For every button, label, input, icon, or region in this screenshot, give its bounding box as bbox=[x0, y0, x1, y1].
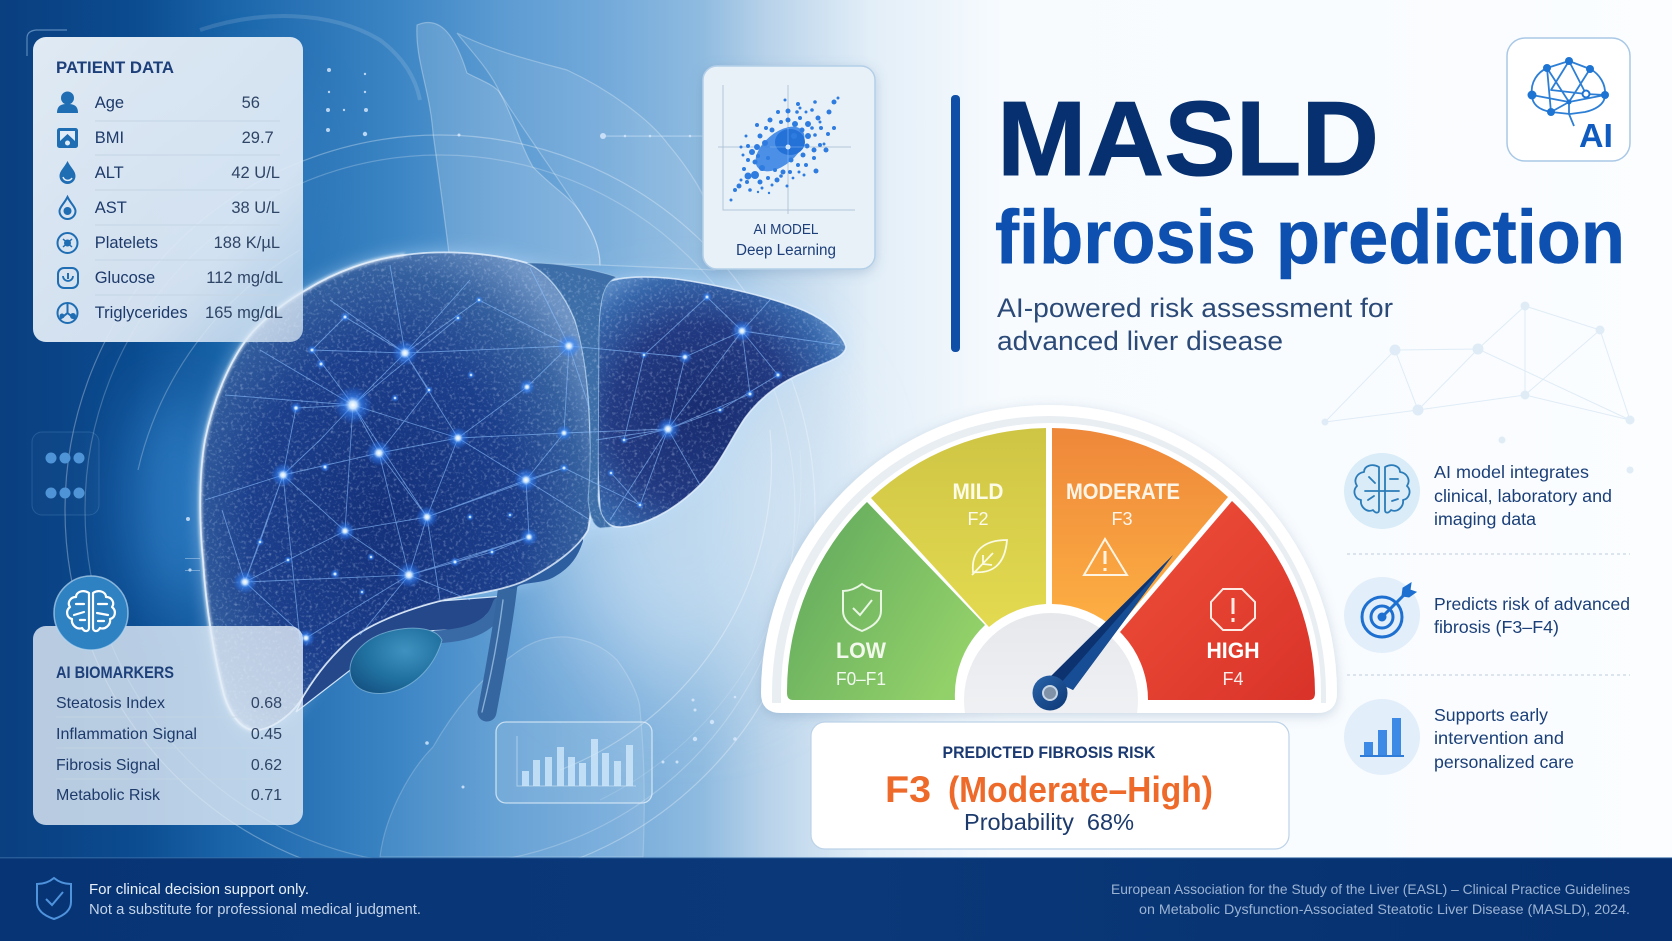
panel: AI biomarkers: Inflammation Signal bbox=[56, 726, 197, 743]
scatter plot bbox=[718, 85, 855, 214]
left liver lobe bbox=[597, 277, 846, 527]
icon: warning triangle bbox=[1084, 539, 1127, 575]
row: platelets: Platelets bbox=[95, 234, 158, 252]
row: triglycerides: 165 mg/dL bbox=[205, 304, 283, 322]
rim highlight bbox=[200, 255, 405, 730]
panel: AI biomarkers: Steatosis Index bbox=[56, 695, 165, 712]
disclaimer: Not a substitute for professional medical judgment. bbox=[89, 901, 421, 918]
icon: AI brain badge: AI bbox=[1579, 117, 1613, 154]
title: fibrosis prediction: fibrosis prediction bbox=[995, 195, 1625, 280]
point: early intervention: personalized care bbox=[1434, 752, 1574, 772]
faint network top right bbox=[1322, 302, 1634, 473]
segment: moderate bbox=[1052, 428, 1228, 630]
icon: stop octagon bbox=[1211, 589, 1255, 630]
title block bbox=[951, 80, 1625, 356]
labels: moderate: F3 bbox=[1111, 509, 1133, 529]
liver glow bbox=[200, 252, 846, 730]
icon: biomarker brain badge bbox=[54, 576, 128, 650]
point: early intervention: Supports early bbox=[1434, 705, 1548, 725]
background data ticks bbox=[185, 68, 737, 788]
labels: low: F0–F1 bbox=[836, 669, 886, 689]
row: AST bbox=[60, 197, 280, 219]
row: ALT: 42 U/L bbox=[231, 164, 280, 182]
labels: mild: MILD bbox=[952, 479, 1004, 504]
heading: patient data: PATIENT DATA bbox=[56, 59, 174, 77]
neural network lines bbox=[205, 265, 840, 640]
panel: AI model scatter bbox=[703, 66, 875, 269]
point: integrates data: imaging data bbox=[1434, 509, 1536, 529]
point: predicts risk bbox=[1344, 577, 1630, 653]
panel: AI biomarkers bbox=[33, 576, 303, 825]
disclaimer: For clinical decision support only. bbox=[89, 881, 309, 898]
result value: F3 bbox=[885, 769, 931, 810]
row: glucose: 112 mg/dL bbox=[206, 269, 283, 287]
row: BMI: BMI bbox=[95, 129, 124, 147]
segment: high bbox=[1120, 501, 1315, 700]
row: AST: 38 U/L bbox=[231, 199, 280, 217]
liver underside bbox=[296, 596, 505, 712]
row: age: 56 bbox=[242, 94, 260, 112]
labels: mild bbox=[952, 479, 1004, 529]
point: predicts risk: fibrosis (F3–F4) bbox=[1434, 617, 1559, 637]
footer bbox=[0, 857, 1672, 941]
row: triglycerides: Triglycerides bbox=[95, 304, 188, 322]
panel: predicted fibrosis risk bbox=[811, 722, 1289, 849]
hud rings bbox=[65, 135, 815, 885]
icon: leaf bbox=[972, 540, 1007, 575]
labels: low: LOW bbox=[836, 638, 886, 663]
segment: low bbox=[787, 502, 985, 700]
key points bbox=[1344, 453, 1630, 775]
labels: moderate: MODERATE bbox=[1066, 479, 1180, 504]
row: glucose bbox=[58, 268, 283, 288]
point: early intervention: intervention and bbox=[1434, 728, 1564, 748]
icon: AI brain badge bbox=[1507, 38, 1630, 161]
needle bbox=[1032, 555, 1173, 710]
row: glucose: Glucose bbox=[95, 269, 155, 287]
row: age bbox=[57, 92, 260, 113]
row: BMI: 29.7 bbox=[242, 129, 274, 147]
panel: AI biomarkers: 0.45 bbox=[251, 726, 282, 743]
right liver lobe bbox=[200, 252, 592, 730]
bile ducts bbox=[436, 540, 576, 712]
labels: low bbox=[836, 638, 886, 689]
row: AST: AST bbox=[95, 199, 127, 217]
segment: mild bbox=[871, 428, 1046, 627]
point: predicts risk: Predicts risk of advanced bbox=[1434, 594, 1630, 614]
panel: patient data bbox=[27, 30, 303, 342]
chart panel: background bars bbox=[496, 722, 652, 803]
title: MASLD: MASLD bbox=[997, 80, 1379, 198]
gauge hub bbox=[964, 613, 1138, 713]
panel: predicted fibrosis risk: Probability 68% bbox=[964, 809, 1134, 835]
icon: shield check bbox=[843, 584, 881, 631]
row: triglycerides bbox=[58, 303, 283, 323]
labels: high bbox=[1206, 638, 1260, 689]
liver illustration bbox=[200, 252, 846, 730]
row: platelets: 188 K/µL bbox=[214, 234, 280, 252]
result value: (Moderate–High) bbox=[948, 769, 1213, 810]
point: early intervention bbox=[1344, 699, 1574, 775]
labels: moderate bbox=[1066, 479, 1180, 529]
gauge frame bbox=[761, 405, 1337, 713]
panel: dots decoration bbox=[32, 432, 99, 515]
panel: AI biomarkers: Metabolic Risk bbox=[56, 787, 161, 804]
icon: footer shield bbox=[37, 878, 71, 919]
panel: AI model scatter: Deep Learning bbox=[736, 242, 836, 259]
row: ALT: ALT bbox=[95, 164, 124, 182]
row: ALT bbox=[60, 161, 280, 184]
panel: predicted fibrosis risk: PREDICTED FIBROSIS RISK bbox=[942, 743, 1156, 762]
risk gauge bbox=[758, 402, 1342, 722]
gallbladder bbox=[350, 628, 442, 693]
panel: AI biomarkers: Fibrosis Signal bbox=[56, 757, 160, 774]
neural network nodes bbox=[233, 292, 783, 647]
citation bbox=[1111, 881, 1630, 917]
falciform band bbox=[527, 263, 617, 528]
point: integrates data: clinical, laboratory and bbox=[1434, 486, 1612, 506]
subtitle: advanced liver disease bbox=[997, 326, 1283, 356]
disclaimer bbox=[89, 881, 421, 918]
row: age: Age bbox=[95, 94, 124, 112]
heading: AI biomarkers: AI BIOMARKERS bbox=[56, 664, 174, 682]
panel: AI biomarkers: 0.71 bbox=[251, 787, 282, 804]
labels: high: F4 bbox=[1222, 669, 1244, 689]
surface texture bbox=[200, 252, 846, 730]
panel: AI biomarkers: 0.62 bbox=[251, 757, 282, 774]
point: integrates data: AI model integrates bbox=[1434, 462, 1589, 482]
point: integrates data bbox=[1344, 453, 1612, 529]
subtitle bbox=[997, 293, 1393, 356]
labels: mild: F2 bbox=[967, 509, 989, 529]
row: platelets bbox=[58, 233, 280, 253]
body silhouette bbox=[200, 16, 715, 857]
citation: European Association for the Study of the Liver (EASL) – Clinical Practice Guidelines bbox=[1111, 881, 1630, 897]
panel: AI biomarkers: 0.68 bbox=[251, 695, 282, 712]
caption: AI model: AI MODEL bbox=[754, 222, 818, 238]
citation: on Metabolic Dysfunction-Associated Steatotic Liver Disease (MASLD), 2024. bbox=[1139, 901, 1630, 917]
row: BMI bbox=[57, 128, 274, 148]
subtitle: AI-powered risk assessment for bbox=[997, 293, 1393, 323]
labels: high: HIGH bbox=[1206, 638, 1260, 663]
